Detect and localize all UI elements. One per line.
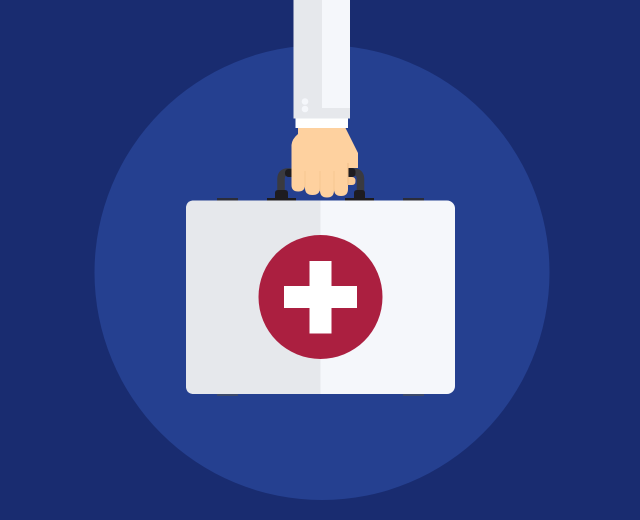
thumb shading bbox=[348, 163, 349, 185]
sleeve bbox=[294, 0, 350, 118]
case body bbox=[186, 200, 455, 394]
palm bbox=[292, 128, 358, 180]
shirt cuff bbox=[296, 118, 348, 128]
case feet bbox=[217, 198, 424, 396]
thumb tip bbox=[346, 177, 356, 185]
white cross bbox=[284, 261, 357, 334]
sleeve buttons bbox=[302, 98, 308, 112]
hand bbox=[292, 128, 358, 198]
background circle bbox=[94, 45, 550, 500]
finger creases bbox=[305, 171, 334, 191]
case handle bbox=[267, 168, 374, 200]
red circle bbox=[258, 235, 382, 359]
fingers bbox=[292, 165, 348, 198]
medical case bbox=[186, 200, 455, 394]
